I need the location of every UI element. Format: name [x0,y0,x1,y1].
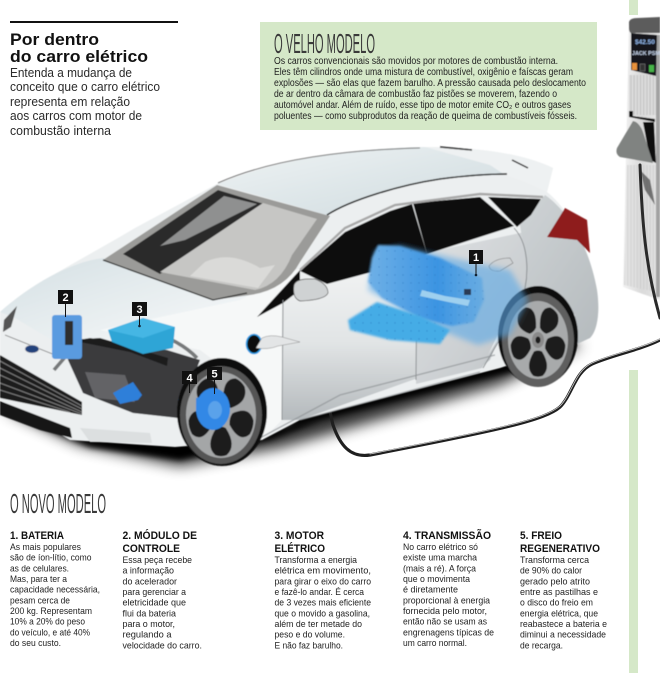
column 3: motor eletrico: ELÉTRICO [274,542,325,555]
column 2: modulo de controle: 2. MÓDULO DE [122,529,197,542]
column 4: transmissao: (mais a ré). A força [403,563,477,573]
charger slot [629,111,655,122]
heading: Por dentro [10,31,99,49]
column 1: bateria: As mais populares [10,542,81,552]
charger body [623,18,660,300]
battery lower seat [348,302,450,344]
hood shut line [5,335,55,355]
column 4: transmissao: engrenagens típicas de [403,627,494,637]
windshield base line [103,260,247,300]
battery connectors [420,290,470,306]
door lines [282,228,527,420]
text: O NOVO MODELO [10,488,106,519]
column 3: motor eletrico: E não faz barulho. [274,640,343,650]
intro text: conceito que o carro elétrico [10,79,160,94]
hood [0,258,258,345]
column 5: freio regenerativo: reabastece a bateria e [520,619,607,629]
column 5: freio regenerativo [520,530,607,650]
rear door window [413,197,514,254]
battery glow [368,245,528,345]
part 4: transmission [178,391,198,413]
column 1: bateria: 1. BATERIA [10,530,64,542]
callout 4 [182,371,197,393]
column 2: modulo de controle: Essa peça recebe [122,555,192,565]
a-pillar gap [257,270,300,317]
callout 3: 3 [136,304,143,316]
callout 2 [58,290,73,317]
charging port [246,334,300,354]
column 3: motor eletrico: e fazê-lo andar. É cerca [274,587,365,597]
spoiler [425,147,553,192]
windshield reflection [160,196,257,246]
charger screen: $42.50 [635,39,655,46]
column 4: transmissao: que o movimenta [403,574,471,584]
column 4: transmissao: fornecida pelo motor, [403,606,487,616]
column 2: modulo de controle: para gerenciar a [122,587,187,597]
column 4: transmissao: existe uma marcha [403,553,478,563]
heading line 2: do carro elétrico [10,48,148,66]
part 1: battery pack [348,245,528,345]
charger screen: JACK PSM [632,51,660,57]
panel: o velho modelo: O VELHO MODELO [274,28,375,59]
column 1: bateria: do seu custo. [10,638,61,648]
column 5: freio regenerativo: 5. FREIO [520,530,562,542]
column 2: modulo de controle: velocidade do carro. [122,640,202,650]
column 2: modulo de controle [122,529,202,650]
text: old model description: explosões — são elas que fazem barulho. A pressão causada pelo deslocamento [274,78,586,89]
part: motor blue [113,382,142,404]
part 5: regenerative brake [196,388,230,430]
front wheel [177,358,267,466]
charging cable [290,165,660,455]
column 3: motor eletrico: 3. MOTOR [274,530,324,542]
column 5: freio regenerativo: gerado pelo atrito [520,576,590,586]
column 4: transmissao: 4. TRANSMISSÃO [403,529,491,542]
callout 3 [132,302,147,327]
column 1: bateria: 200 kg. Representam [10,606,92,616]
tail light [547,208,590,253]
text: old model description: Os carros convencionais são movidos por motores de combustão interna. [274,56,558,67]
intro text [10,65,160,138]
text: old model description: de ar dentro da câmara de combustão faz pistões se moverem, fazendo o [274,89,557,100]
text: old model description [274,56,586,122]
callout 2: 2 [62,292,69,304]
column 2: modulo de controle: regulando a [122,630,172,640]
grille [0,355,82,415]
column 5: freio regenerativo: energia elétrica, que [520,608,598,618]
column 4: transmissao: proporcional à energia [403,595,491,605]
column 1: bateria: 10% a 20% do peso [10,617,85,627]
charging station [616,17,660,300]
column 1: bateria: capacidade necessária, [10,585,100,595]
column 4: transmissao [403,529,494,648]
rear door [416,232,530,384]
windshield dark glass [123,190,264,274]
callout 1: 1 [473,252,479,264]
windshield [103,185,330,300]
column 3: motor eletrico [274,530,371,650]
column 1: bateria: do veículo, e até 40% [10,627,90,637]
column 5: freio regenerativo: entre as pastilhas e [520,587,598,597]
column 5: freio regenerativo: REGENERATIVO [520,543,600,555]
column 5: freio regenerativo: Transforma cerca [520,555,590,565]
column 1: bateria: as de celulares. [10,563,69,573]
text: old model description: Eles têm cilindros onde uma mistura de combustível, oxigênio e faíscas geram [274,67,573,78]
lower bumper [0,401,72,438]
panel: o velho modelo [260,22,597,130]
front side window [300,204,427,284]
column 5: freio regenerativo: de recarga. [520,640,563,650]
car [0,147,598,466]
column 4: transmissao: um carro normal. [403,638,467,648]
intro text: representa em relação [10,94,130,109]
front fender [100,268,300,440]
column 3: motor eletrico: peso e do volume. [274,630,345,640]
callout 5 [207,367,222,394]
column 4: transmissao: é diretamente [403,585,458,595]
column 2: modulo de controle: eletricidade que [122,598,186,608]
column 3: motor eletrico: que o movido a gasolina, [274,608,370,618]
column 1: bateria: são de íon-lítio, como [10,553,92,563]
intro text: Entenda a mudança de [10,65,132,80]
green side strip top [629,0,638,15]
green side strip bottom [629,370,638,673]
callout 4: 4 [186,372,193,384]
charger head [629,17,660,33]
ford logo [25,345,39,353]
column 2: modulo de controle: CONTROLE [122,543,180,555]
ground shadow [0,345,585,466]
column 4: transmissao: No carro elétrico só [403,542,478,552]
rear wheel [498,286,578,387]
intro text: combustão interna [10,123,112,138]
roof [218,147,507,215]
intro text: aos carros com motor de [10,108,142,123]
text: old model description: poluentes — como subprodutos da reação de queima de combustíveis fósseis. [274,111,577,122]
column 5: freio regenerativo: diminui a necessidade [520,630,606,640]
column 3: motor eletrico: Transforma a energia [274,555,358,565]
rear quarter [480,195,598,368]
column 2: modulo de controle: flui da bateria [122,608,177,618]
windshield frame [103,185,330,300]
side mirror [294,279,328,301]
pipes [54,331,197,370]
part 2: control module [52,315,82,359]
column 3: motor eletrico: para girar o eixo do carro [274,576,371,586]
top rule [10,21,178,23]
rear quarter window [488,197,541,227]
title block [10,31,160,138]
engine assembly [67,338,200,418]
text: old model description: automóvel andar. Além de ruído, esse tipo de motor emite CO₂ e outros gases [274,100,571,111]
column 2: modulo de controle: a informação [122,566,174,576]
column 1: bateria: Mas, para ter a [10,574,68,584]
charging handle [616,121,653,163]
column 2: modulo de controle: do acelerador [122,576,177,586]
column 5: freio regenerativo: de 90% do calor [520,566,582,576]
column 3: motor eletrico: elétrica em movimento, [274,566,371,576]
charger screen [631,33,660,76]
roof edge line [327,174,507,215]
column 3: motor eletrico: de 3 vezes mais eficiente [274,598,371,608]
column 3: motor eletrico: além de ter metade do [274,619,362,629]
callout 1 [469,250,483,276]
doors [282,250,418,420]
car body [0,147,598,447]
column 4: transmissao: então não se usam as [403,617,487,627]
windshield light glass [160,203,317,290]
door handle [489,258,513,271]
battery upper seat [368,245,484,326]
part 3: battery box [108,318,175,354]
callout 5: 5 [211,368,218,380]
column 1: bateria: pesam cerca de [10,595,70,605]
column 5: freio regenerativo: o disco do freio em [520,598,593,608]
headlight [3,306,17,332]
column 2: modulo de controle: para o motor, [122,619,175,629]
window frame [300,194,543,270]
column 1: bateria [10,530,100,648]
